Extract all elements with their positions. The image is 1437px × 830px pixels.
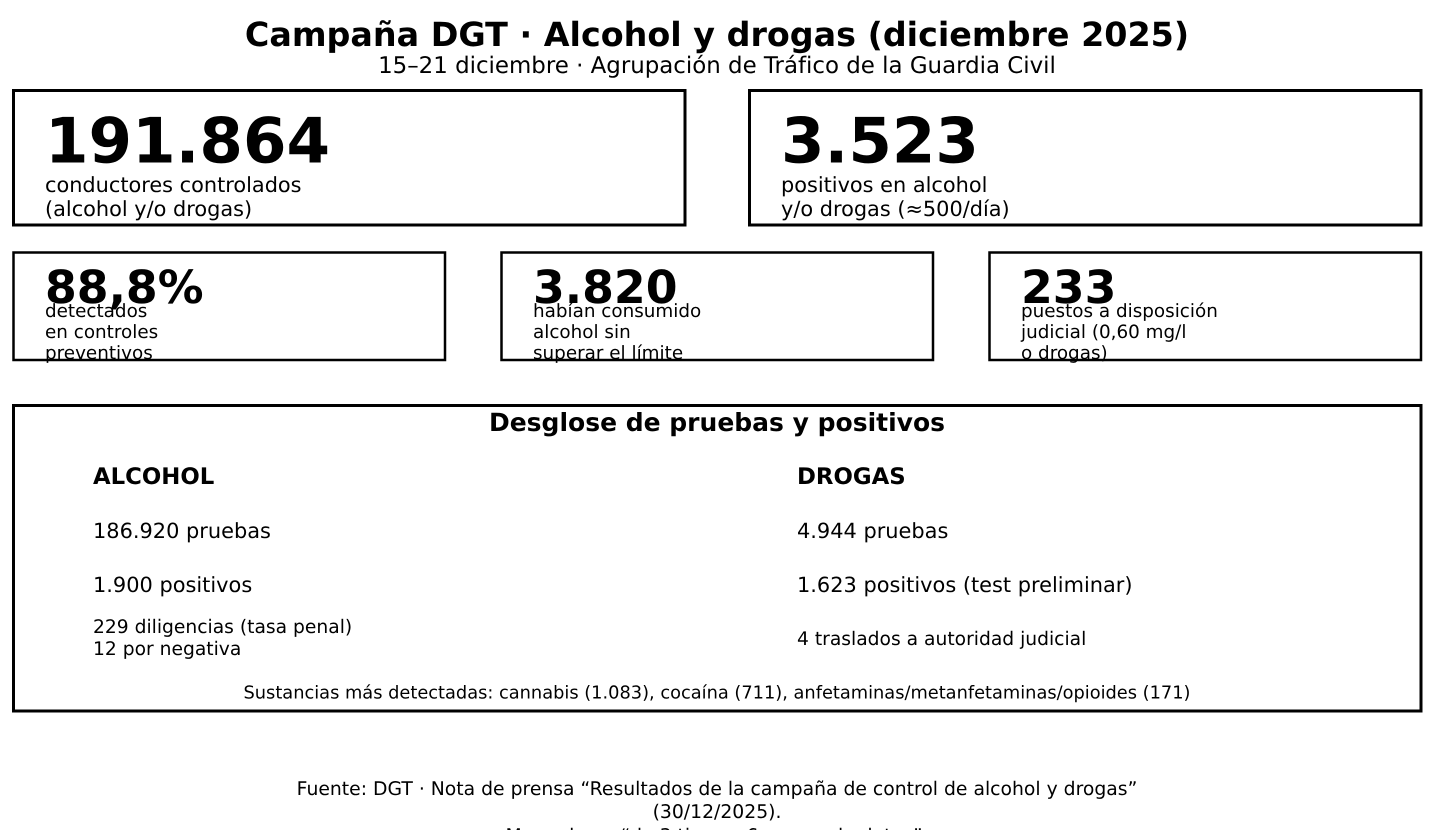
- panel: controles preventivos: 88,8%: [45, 261, 204, 314]
- panel: conductores controlados: 191.864: [45, 104, 330, 178]
- panel: controles preventivos: detectados: [45, 301, 147, 322]
- panel: sin superar el límite: superar el límite: [533, 343, 683, 364]
- panel: disposición judicial: 233: [1021, 261, 1116, 314]
- panel: sin superar el límite: alcohol sin: [533, 322, 631, 343]
- panel: conductores controlados: [14, 90, 685, 225]
- substances note: Sustancias más detectadas: cannabis (1.083), cocaína (711), anfetaminas/metanfetaminas/opioides (171): [244, 682, 1190, 704]
- title: Campaña DGT · Alcohol y drogas (diciembre 2025): [245, 15, 1189, 54]
- column: alcohol: [93, 464, 352, 660]
- panel: desglose de pruebas y positivos: [14, 406, 1421, 711]
- panel: positivos: positivos en alcohol: [781, 173, 987, 197]
- column: drogas: 4.944 pruebas: [797, 519, 948, 543]
- panel: controles preventivos: [14, 252, 445, 364]
- panel: conductores controlados: (alcohol y/o drogas): [45, 197, 252, 221]
- column: alcohol: 1.900 positivos: [93, 573, 252, 597]
- column: drogas: [797, 464, 1133, 650]
- column: alcohol: 186.920 pruebas: [93, 519, 271, 543]
- panel: disposición judicial: o drogas): [1021, 343, 1108, 364]
- panel: positivos: y/o drogas (≈500/día): [781, 197, 1010, 221]
- column: alcohol: 12 por negativa: [93, 639, 241, 660]
- panel: controles preventivos: preventivos: [45, 343, 153, 364]
- column: drogas: DROGAS: [797, 464, 906, 490]
- panel: positivos: 3.523: [781, 104, 979, 178]
- panel: disposición judicial: [990, 252, 1421, 364]
- panel: positivos: [750, 90, 1421, 225]
- source footer: (30/12/2025).: [653, 802, 781, 823]
- column: drogas: 4 traslados a autoridad judicial: [797, 629, 1086, 650]
- panel: disposición judicial: judicial (0,60 mg/l: [1020, 322, 1186, 343]
- panel heading: Desglose de pruebas y positivos: [489, 408, 945, 437]
- panel: disposición judicial: puestos a disposición: [1021, 301, 1218, 322]
- column: alcohol: ALCOHOL: [93, 464, 214, 490]
- panel: sin superar el límite: habían consumido: [533, 301, 701, 322]
- source footer: Fuente: DGT · Nota de prensa “Resultados de la campaña de control de alcohol y drogas”: [297, 779, 1137, 800]
- source footer: [297, 779, 1137, 830]
- panel: sin superar el límite: 3.820: [533, 261, 678, 314]
- column: drogas: 1.623 positivos (test preliminar): [797, 573, 1133, 597]
- panel: sin superar el límite: [502, 252, 933, 364]
- subtitle: 15–21 diciembre · Agrupación de Tráfico de la Guardia Civil: [378, 53, 1056, 79]
- column: alcohol: 229 diligencias (tasa penal): [93, 617, 352, 638]
- panel: controles preventivos: en controles: [45, 322, 158, 343]
- panel: conductores controlados: conductores controlados: [45, 173, 302, 197]
